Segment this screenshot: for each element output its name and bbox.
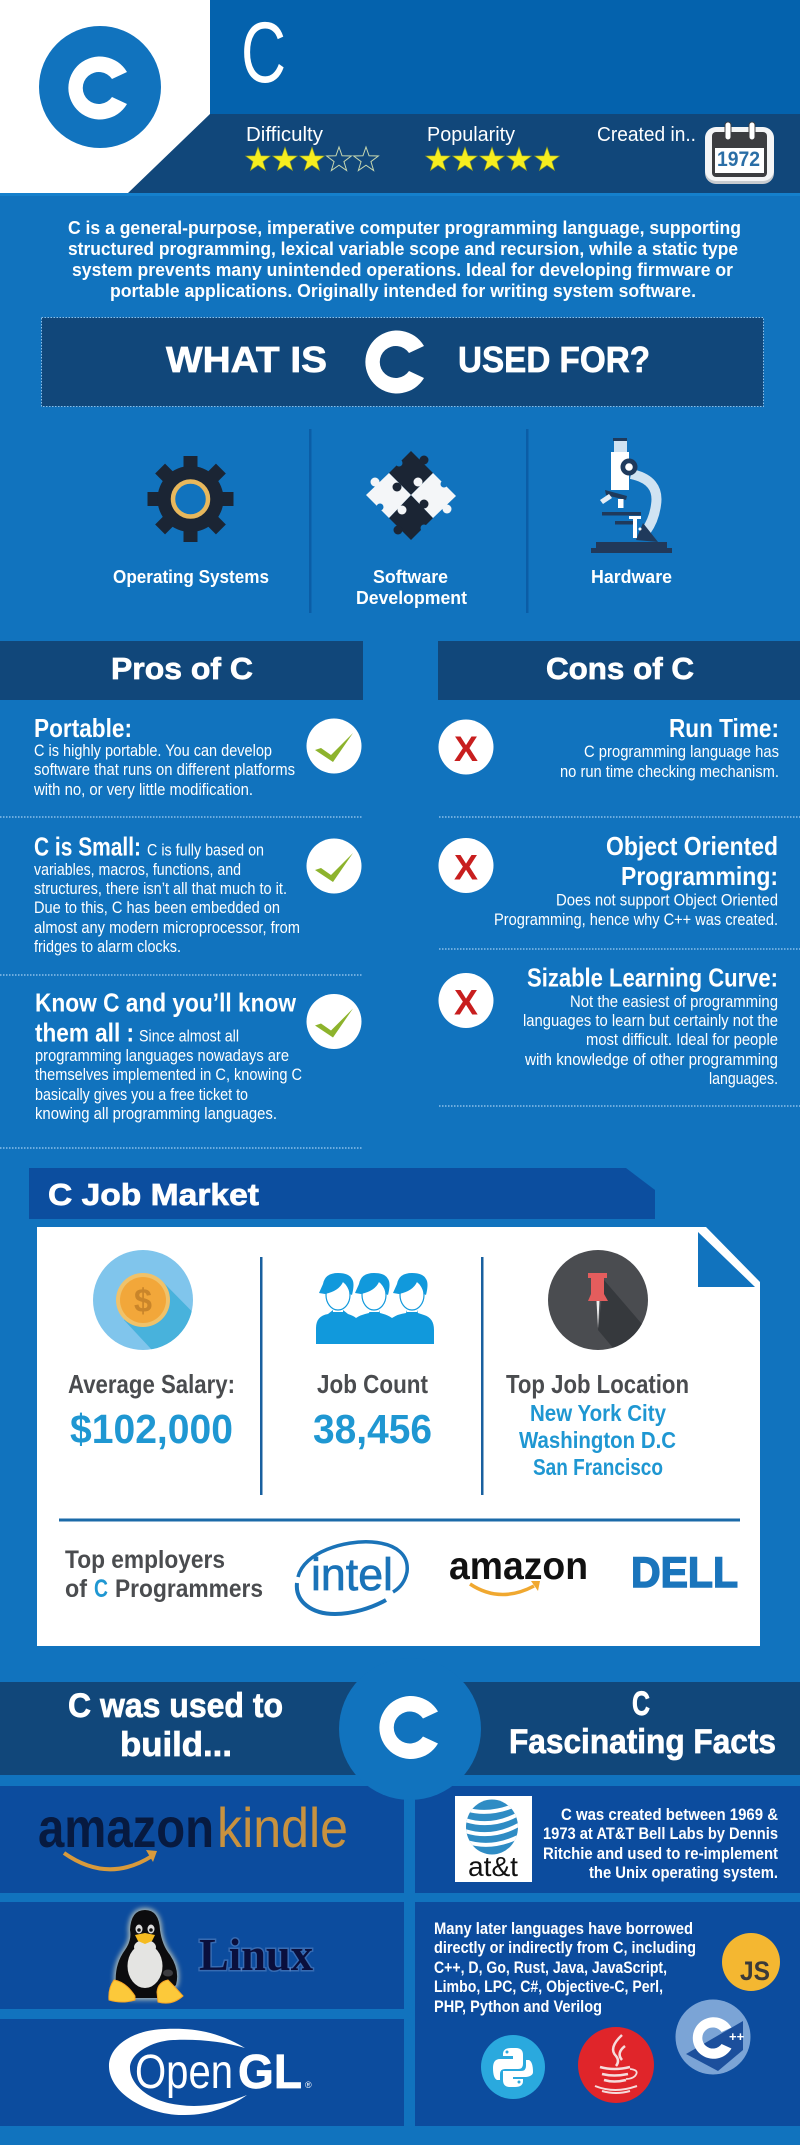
logo: intel [297,1542,407,1614]
con: run time: Run Time: [669,713,779,743]
icon: page fold [698,1232,755,1287]
con: sizable learning curve [438,962,778,1088]
intro text block: system prevents many unintended operations. Ideal for developing firmware or [72,260,733,280]
panel: uses of C [113,429,672,613]
heading: cons: Cons of C [546,651,694,686]
label: top employers: C [94,1575,108,1603]
pro: C is small: almost any modern microprocessor, from [34,918,300,937]
stat: job count: Job Count [317,1369,428,1399]
logo: Dell: DELL [631,1549,738,1597]
panel: amazon kindle [0,1786,404,1893]
icon: JavaScript: JS [740,1956,770,1986]
banner: what is C used for: USED FOR? [458,339,650,380]
con: object oriented programming: Object Oriented [606,831,778,861]
panel: Linux [0,1902,404,2009]
con: sizable learning curve: languages. [709,1069,778,1088]
heading: C fascinating facts: C [632,1685,650,1723]
panel: job market card [37,1227,760,1646]
pro: know C: programming languages nowadays are [35,1046,289,1065]
white logo block [0,0,210,193]
panel: language influence fact [415,1902,800,2126]
stat: job count: 38,456 [313,1406,432,1452]
con: run time [438,713,779,781]
banner: what is C used for: WHAT IS [166,339,327,380]
stat: average salary [68,1369,235,1452]
icon: C logo [39,26,161,148]
icon: people [316,1273,434,1344]
icon: Tux penguin [109,1910,183,2003]
con: sizable learning curve: X [454,984,479,1022]
panel: amazon kindle: kindle [217,1796,348,1859]
panel: OpenGL [0,2019,404,2126]
con: object oriented programming [438,831,778,929]
panel: AT&T fact [415,1786,800,1893]
icon: calendar 1972 [705,122,774,184]
heading: C job market: C Job Market [48,1177,259,1212]
stat: top job location [506,1369,689,1480]
pro: portable: software that runs on different platforms [34,760,295,779]
icon: gear [148,456,234,542]
icon: Java [578,2027,654,2103]
header panel [0,0,800,196]
panel: OpenGL: GL [238,2046,302,2099]
banner: what is C used for [42,318,764,406]
icon: Python [481,2035,545,2099]
stat: top job location: Top Job Location [506,1369,689,1399]
heading: cons [438,641,800,700]
pro: portable: C is highly portable. You can develop [34,741,272,760]
icon: C++ [676,2000,750,2074]
icon: map pin [548,1250,648,1350]
fact text: the Unix operating system. [589,1863,778,1882]
fact text [434,1919,696,2016]
icon: C++: ++ [729,2029,745,2044]
difficulty rating: Difficulty [246,124,323,146]
icon: salary coin: $ [134,1282,152,1319]
stat: average salary: Average Salary: [68,1369,235,1399]
fact text: C++, D, Go, Rust, Java, JavaScript, [434,1958,667,1977]
pro: C is small: variables, macros, functions, and [34,860,241,879]
fact text [543,1805,778,1882]
panel: OpenGL: Open [135,2046,233,2099]
pro: know C [35,988,362,1123]
stat: average salary: $102,000 [70,1406,233,1452]
fact text: PHP, Python and Verilog [434,1997,602,2016]
pro: C is small: C is Small: [34,832,141,862]
pro: know C: Know C and you’ll know [35,988,297,1018]
con: sizable learning curve: with knowledge of other programming [524,1050,778,1069]
pro: C is small: fridges to alarm clocks. [34,937,181,956]
pro: know C: Since almost all [139,1026,239,1046]
pro: C is small [34,832,362,956]
label: operating systems: Operating Systems [113,567,269,587]
panel: amazon kindle: amazon [38,1796,214,1859]
con: run time: X [454,730,479,769]
label: software development: Software [373,567,448,587]
heading: pros: Pros of C [111,651,253,686]
icon: calendar 1972: 1972 [717,148,760,171]
heading: C was used to build: C was used to [68,1687,283,1725]
fact text: directly or indirectly from C, including [434,1938,696,1957]
created in label: Created in.. [597,124,696,146]
pro: know C: knowing all programming languages. [35,1104,277,1123]
panel: Linux: Linux [199,1929,313,1980]
pro: know C: them all : [35,1018,134,1048]
icon: puzzle [366,451,456,540]
logo: intel: intel [311,1549,393,1600]
heading: C was used to build: build... [120,1726,232,1764]
section headers [0,1658,800,1800]
heading: C job market [29,1168,655,1219]
con: object oriented programming: Programming: [621,861,778,891]
difficulty rating [246,124,378,171]
icon: microscope [591,438,672,553]
intro text block: C is a general-purpose, imperative computer programming language, supporting [68,218,741,238]
icon: center C badge [339,1658,481,1800]
intro text block: portable applications. Originally intended for writing system software. [110,281,696,301]
stat: top job location: San Francisco [533,1454,663,1480]
stat: top job location: Washington D.C [519,1427,676,1453]
pro: know C: basically gives you a free ticket to [35,1085,248,1104]
pro: portable: Portable: [34,713,132,743]
panel: cons of C [438,641,800,1106]
label: hardware: Hardware [591,567,672,587]
icon: JavaScript [722,1933,780,1991]
heading: C fascinating facts: Fascinating Facts [509,1723,776,1761]
panel: pros of C [0,641,363,1148]
pro: C is small: C is fully based on [147,840,264,860]
label: software development: Development [356,588,467,608]
stat: top job location: New York City [530,1400,666,1426]
fact text: Many later languages have borrowed [434,1919,693,1938]
popularity rating [426,124,559,171]
panel: OpenGL: ® [305,2080,312,2090]
label: top employers: Top employers [65,1546,225,1574]
label: software development [356,567,467,608]
heading: pros [0,641,363,700]
fact text: Limbo, LPC, C#, Objective-C, Perl, [434,1977,663,1996]
intro text block [68,218,741,301]
logo: AT&T: at&t [468,1851,518,1882]
label: top employers: Programmers [115,1575,263,1603]
label: top employers: of [65,1575,88,1603]
pro: C is small: structures, there isn’t all that much to it. [34,879,287,898]
icon: salary coin [93,1250,193,1350]
pro: portable [33,713,362,799]
pro: know C: themselves implemented in C, knowing C [35,1065,302,1084]
pro: C is small: Due to this, C has been embedded on [34,898,280,917]
stat: job count [313,1369,432,1452]
con: object oriented programming: X [454,848,479,888]
pro: portable: with no, or very little modification. [33,780,253,799]
heading: C fascinating facts [509,1685,776,1761]
popularity rating: Popularity [427,124,515,146]
title: C [241,5,286,101]
intro text block: structured programming, lexical variable scope and recursion, while a static type [68,239,738,259]
label: top employers [65,1546,263,1603]
logo: AT&T [455,1796,532,1882]
heading: C was used to build [68,1687,283,1764]
logo: amazon: amazon [449,1545,588,1588]
